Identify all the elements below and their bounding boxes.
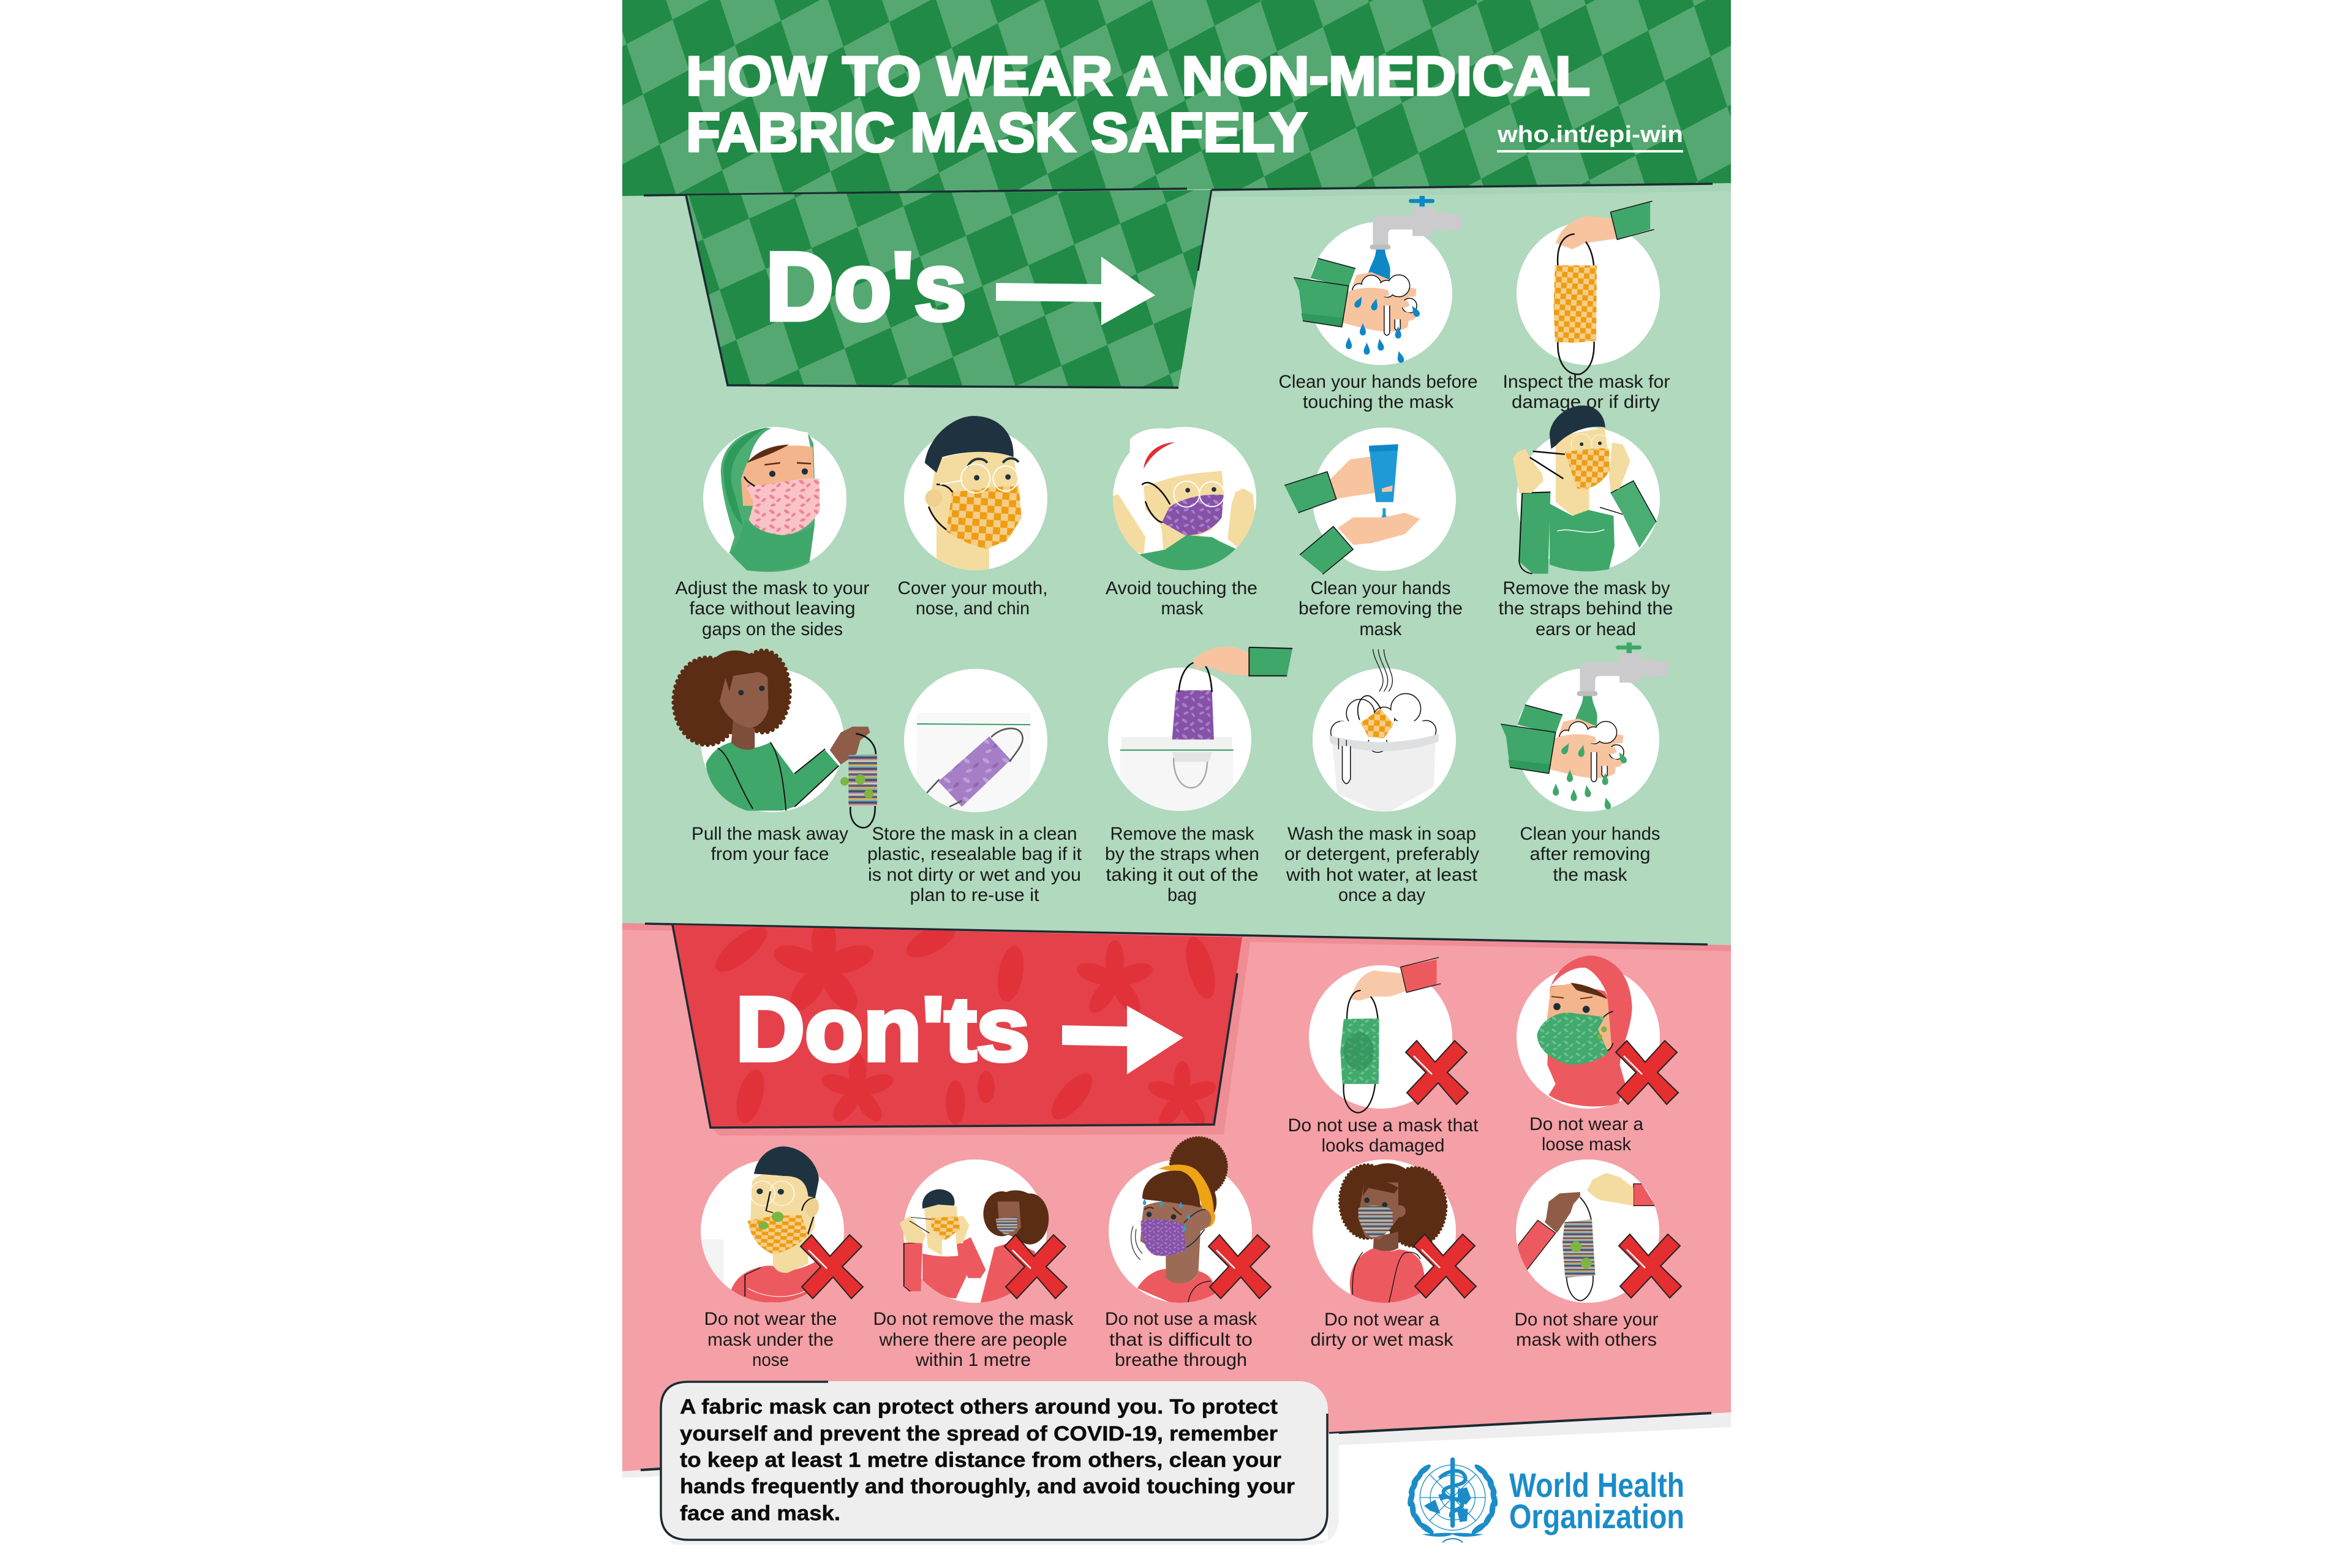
link: who.int/epi-win: who.int/epi-win bbox=[1497, 122, 1683, 148]
caption: that is difficult to bbox=[1109, 1330, 1253, 1350]
caption: Do not use a mask that bbox=[1287, 1115, 1479, 1136]
step: cover mouth nose chin bbox=[898, 416, 1047, 619]
caption bbox=[704, 1309, 837, 1370]
caption: Do not share your bbox=[1514, 1310, 1659, 1330]
banner: don'ts bbox=[673, 916, 1251, 1136]
icon: woman holding a mask away bbox=[674, 650, 877, 827]
caption: Cover your mouth, bbox=[898, 578, 1047, 598]
caption: taking it out of the bbox=[1106, 865, 1258, 885]
caption: bag bbox=[1167, 885, 1197, 905]
caption bbox=[1529, 1114, 1643, 1155]
icon: red cross bbox=[1414, 1234, 1476, 1298]
caption bbox=[1514, 1310, 1659, 1350]
caption: Clean your hands before bbox=[1279, 372, 1477, 392]
arrow bbox=[996, 257, 1155, 325]
caption: the straps behind the bbox=[1498, 598, 1673, 619]
step: clean hands after removing bbox=[1501, 643, 1668, 885]
caption: within 1 metre bbox=[915, 1350, 1031, 1370]
caption bbox=[1311, 1310, 1454, 1350]
callout text: hands frequently and thoroughly, and avoid touching your bbox=[680, 1475, 1295, 1498]
caption: Clean your hands bbox=[1311, 578, 1450, 598]
caption bbox=[692, 824, 848, 864]
icon: woman with loose mask bbox=[1537, 956, 1632, 1107]
callout text: A fabric mask can protect others around you. To protect bbox=[680, 1395, 1278, 1419]
step: wash the mask bbox=[1284, 649, 1479, 905]
caption: once a day bbox=[1338, 885, 1425, 905]
panel: don'ts background bbox=[622, 923, 1731, 1478]
icon: hand lifting mask out of bag bbox=[1120, 647, 1292, 816]
title: HOW TO WEAR A NON-MEDICAL bbox=[686, 46, 1590, 107]
caption bbox=[1105, 1309, 1257, 1370]
arrow bbox=[1062, 1006, 1183, 1074]
logo: World Health Organization bbox=[1406, 1457, 1684, 1542]
caption: before removing the bbox=[1298, 598, 1463, 619]
caption: dirty or wet mask bbox=[1311, 1330, 1454, 1350]
caption bbox=[1284, 824, 1479, 905]
wordmark bbox=[1509, 1466, 1684, 1536]
callout: protect others bbox=[660, 1381, 1339, 1545]
icon: red cross bbox=[1616, 1041, 1678, 1104]
icon: bowl with soap foam bbox=[1329, 649, 1439, 815]
icon: red cross bbox=[1406, 1041, 1468, 1104]
caption: plan to re-use it bbox=[910, 885, 1039, 905]
caption: looks damaged bbox=[1322, 1136, 1444, 1156]
caption bbox=[898, 578, 1047, 619]
caption: nose, and chin bbox=[916, 598, 1030, 619]
caption: Avoid touching the bbox=[1106, 578, 1257, 598]
caption: loose mask bbox=[1542, 1134, 1632, 1155]
poster bbox=[622, 0, 1731, 1545]
caption: Pull the mask away bbox=[692, 824, 848, 844]
icon: passing a mask between hands bbox=[1505, 1173, 1656, 1300]
header band bbox=[622, 0, 1731, 197]
wordmark: World Health bbox=[1509, 1466, 1684, 1504]
caption bbox=[1279, 372, 1477, 412]
caption bbox=[867, 824, 1082, 905]
icon: red cross bbox=[1208, 1235, 1271, 1298]
caption: mask bbox=[1360, 619, 1402, 639]
step: remove the mask from the bag bbox=[1105, 647, 1292, 905]
caption bbox=[1106, 578, 1257, 619]
caption: or detergent, preferably bbox=[1284, 844, 1479, 864]
icon: man and woman close together bbox=[900, 1189, 1049, 1303]
caption bbox=[873, 1309, 1074, 1370]
caption: touching the mask bbox=[1303, 392, 1454, 412]
icon: mask held up bbox=[1553, 201, 1654, 374]
title bbox=[686, 46, 1590, 164]
caption: where there are people bbox=[879, 1330, 1067, 1350]
step: damaged mask bbox=[1287, 957, 1479, 1156]
icon: hand washing with green water bbox=[1501, 643, 1668, 810]
icon: sanitizer tube and hands bbox=[1284, 444, 1420, 575]
caption: Remove the mask bbox=[1110, 824, 1254, 844]
caption: by the straps when bbox=[1105, 844, 1259, 864]
heading: do's: Do's bbox=[766, 233, 967, 341]
caption: Inspect the mask for bbox=[1503, 372, 1670, 392]
caption bbox=[1520, 824, 1660, 885]
caption bbox=[675, 578, 870, 639]
caption: Do not wear the bbox=[704, 1309, 837, 1329]
caption: Store the mask in a clean bbox=[872, 824, 1077, 844]
caption bbox=[1298, 578, 1463, 639]
caption: Remove the mask by bbox=[1503, 578, 1670, 598]
icon: man with mask under nose bbox=[701, 1147, 820, 1303]
caption: mask with others bbox=[1516, 1330, 1657, 1350]
icon: woman with dirty mask bbox=[1340, 1163, 1446, 1304]
caption: nose bbox=[752, 1350, 789, 1370]
caption: Wash the mask in soap bbox=[1287, 824, 1476, 844]
step: remove the mask by the straps bbox=[1498, 405, 1673, 639]
callout text: face and mask. bbox=[680, 1502, 840, 1525]
callout text bbox=[680, 1395, 1295, 1525]
step: clean hands before removing bbox=[1284, 428, 1463, 639]
step: adjust the mask bbox=[675, 427, 870, 639]
icon: hand washing under tap bbox=[1294, 196, 1461, 363]
icon: mask in resealable bag bbox=[917, 723, 1030, 812]
icon: man removing mask bbox=[1513, 405, 1656, 574]
caption: is not dirty or wet and you bbox=[868, 865, 1081, 885]
callout text: to keep at least 1 metre distance from others, clean your bbox=[680, 1449, 1281, 1472]
caption: face without leaving bbox=[690, 598, 855, 619]
step: dirty or wet mask bbox=[1311, 1159, 1476, 1350]
panel: do's background bbox=[622, 172, 1731, 956]
callout text: yourself and prevent the spread of COVID-19, remember bbox=[680, 1422, 1278, 1446]
icon: WHO emblem bbox=[1406, 1457, 1499, 1542]
wordmark: Organization bbox=[1509, 1497, 1684, 1536]
caption: damage or if dirty bbox=[1512, 392, 1660, 412]
step: sharing a mask bbox=[1505, 1159, 1681, 1350]
caption: Adjust the mask to your bbox=[675, 578, 870, 598]
icon: red cross bbox=[1619, 1234, 1681, 1298]
caption: Do not remove the mask bbox=[873, 1309, 1074, 1329]
banner: do's bbox=[686, 190, 1212, 388]
caption: Do not wear a bbox=[1529, 1114, 1643, 1134]
step: clean hands before touching bbox=[1279, 196, 1477, 412]
icon: red cross bbox=[1005, 1235, 1067, 1298]
step: mask under the nose bbox=[701, 1147, 863, 1370]
caption: with hot water, at least bbox=[1286, 865, 1478, 885]
caption bbox=[1287, 1115, 1479, 1156]
icon: red cross bbox=[801, 1235, 863, 1298]
caption: Clean your hands bbox=[1520, 824, 1660, 844]
step: loose mask bbox=[1517, 956, 1678, 1155]
step: pull the mask away bbox=[674, 650, 877, 864]
step: removing the mask near people bbox=[873, 1159, 1074, 1370]
step: store the mask bbox=[867, 669, 1082, 905]
caption: Do not use a mask bbox=[1105, 1309, 1257, 1329]
caption: after removing bbox=[1530, 844, 1650, 864]
caption: ears or head bbox=[1536, 619, 1636, 639]
icon: woman in green scarf bbox=[721, 428, 820, 572]
caption: gaps on the sides bbox=[702, 619, 843, 639]
heading: don'ts: Don'ts bbox=[736, 979, 1030, 1080]
caption bbox=[1498, 578, 1673, 639]
icon: man in orange mask bbox=[925, 416, 1022, 572]
caption: the mask bbox=[1553, 865, 1627, 885]
caption: from your face bbox=[710, 844, 829, 864]
caption bbox=[1503, 372, 1670, 412]
caption: mask under the bbox=[707, 1330, 834, 1350]
caption: Do not wear a bbox=[1324, 1310, 1439, 1330]
caption: breathe through bbox=[1115, 1350, 1247, 1370]
icon: woman struggling to breathe bbox=[1131, 1137, 1227, 1306]
caption: mask bbox=[1161, 598, 1204, 619]
caption bbox=[1105, 824, 1259, 905]
title: FABRIC MASK SAFELY bbox=[686, 102, 1307, 164]
step: mask difficult to breathe through bbox=[1105, 1137, 1271, 1370]
icon: older woman with purple mask bbox=[1113, 428, 1256, 572]
icon: damaged green mask bbox=[1340, 957, 1441, 1113]
step: inspect the mask bbox=[1503, 201, 1670, 412]
caption: plastic, resealable bag if it bbox=[867, 844, 1082, 864]
step: avoid touching the mask bbox=[1106, 427, 1257, 619]
